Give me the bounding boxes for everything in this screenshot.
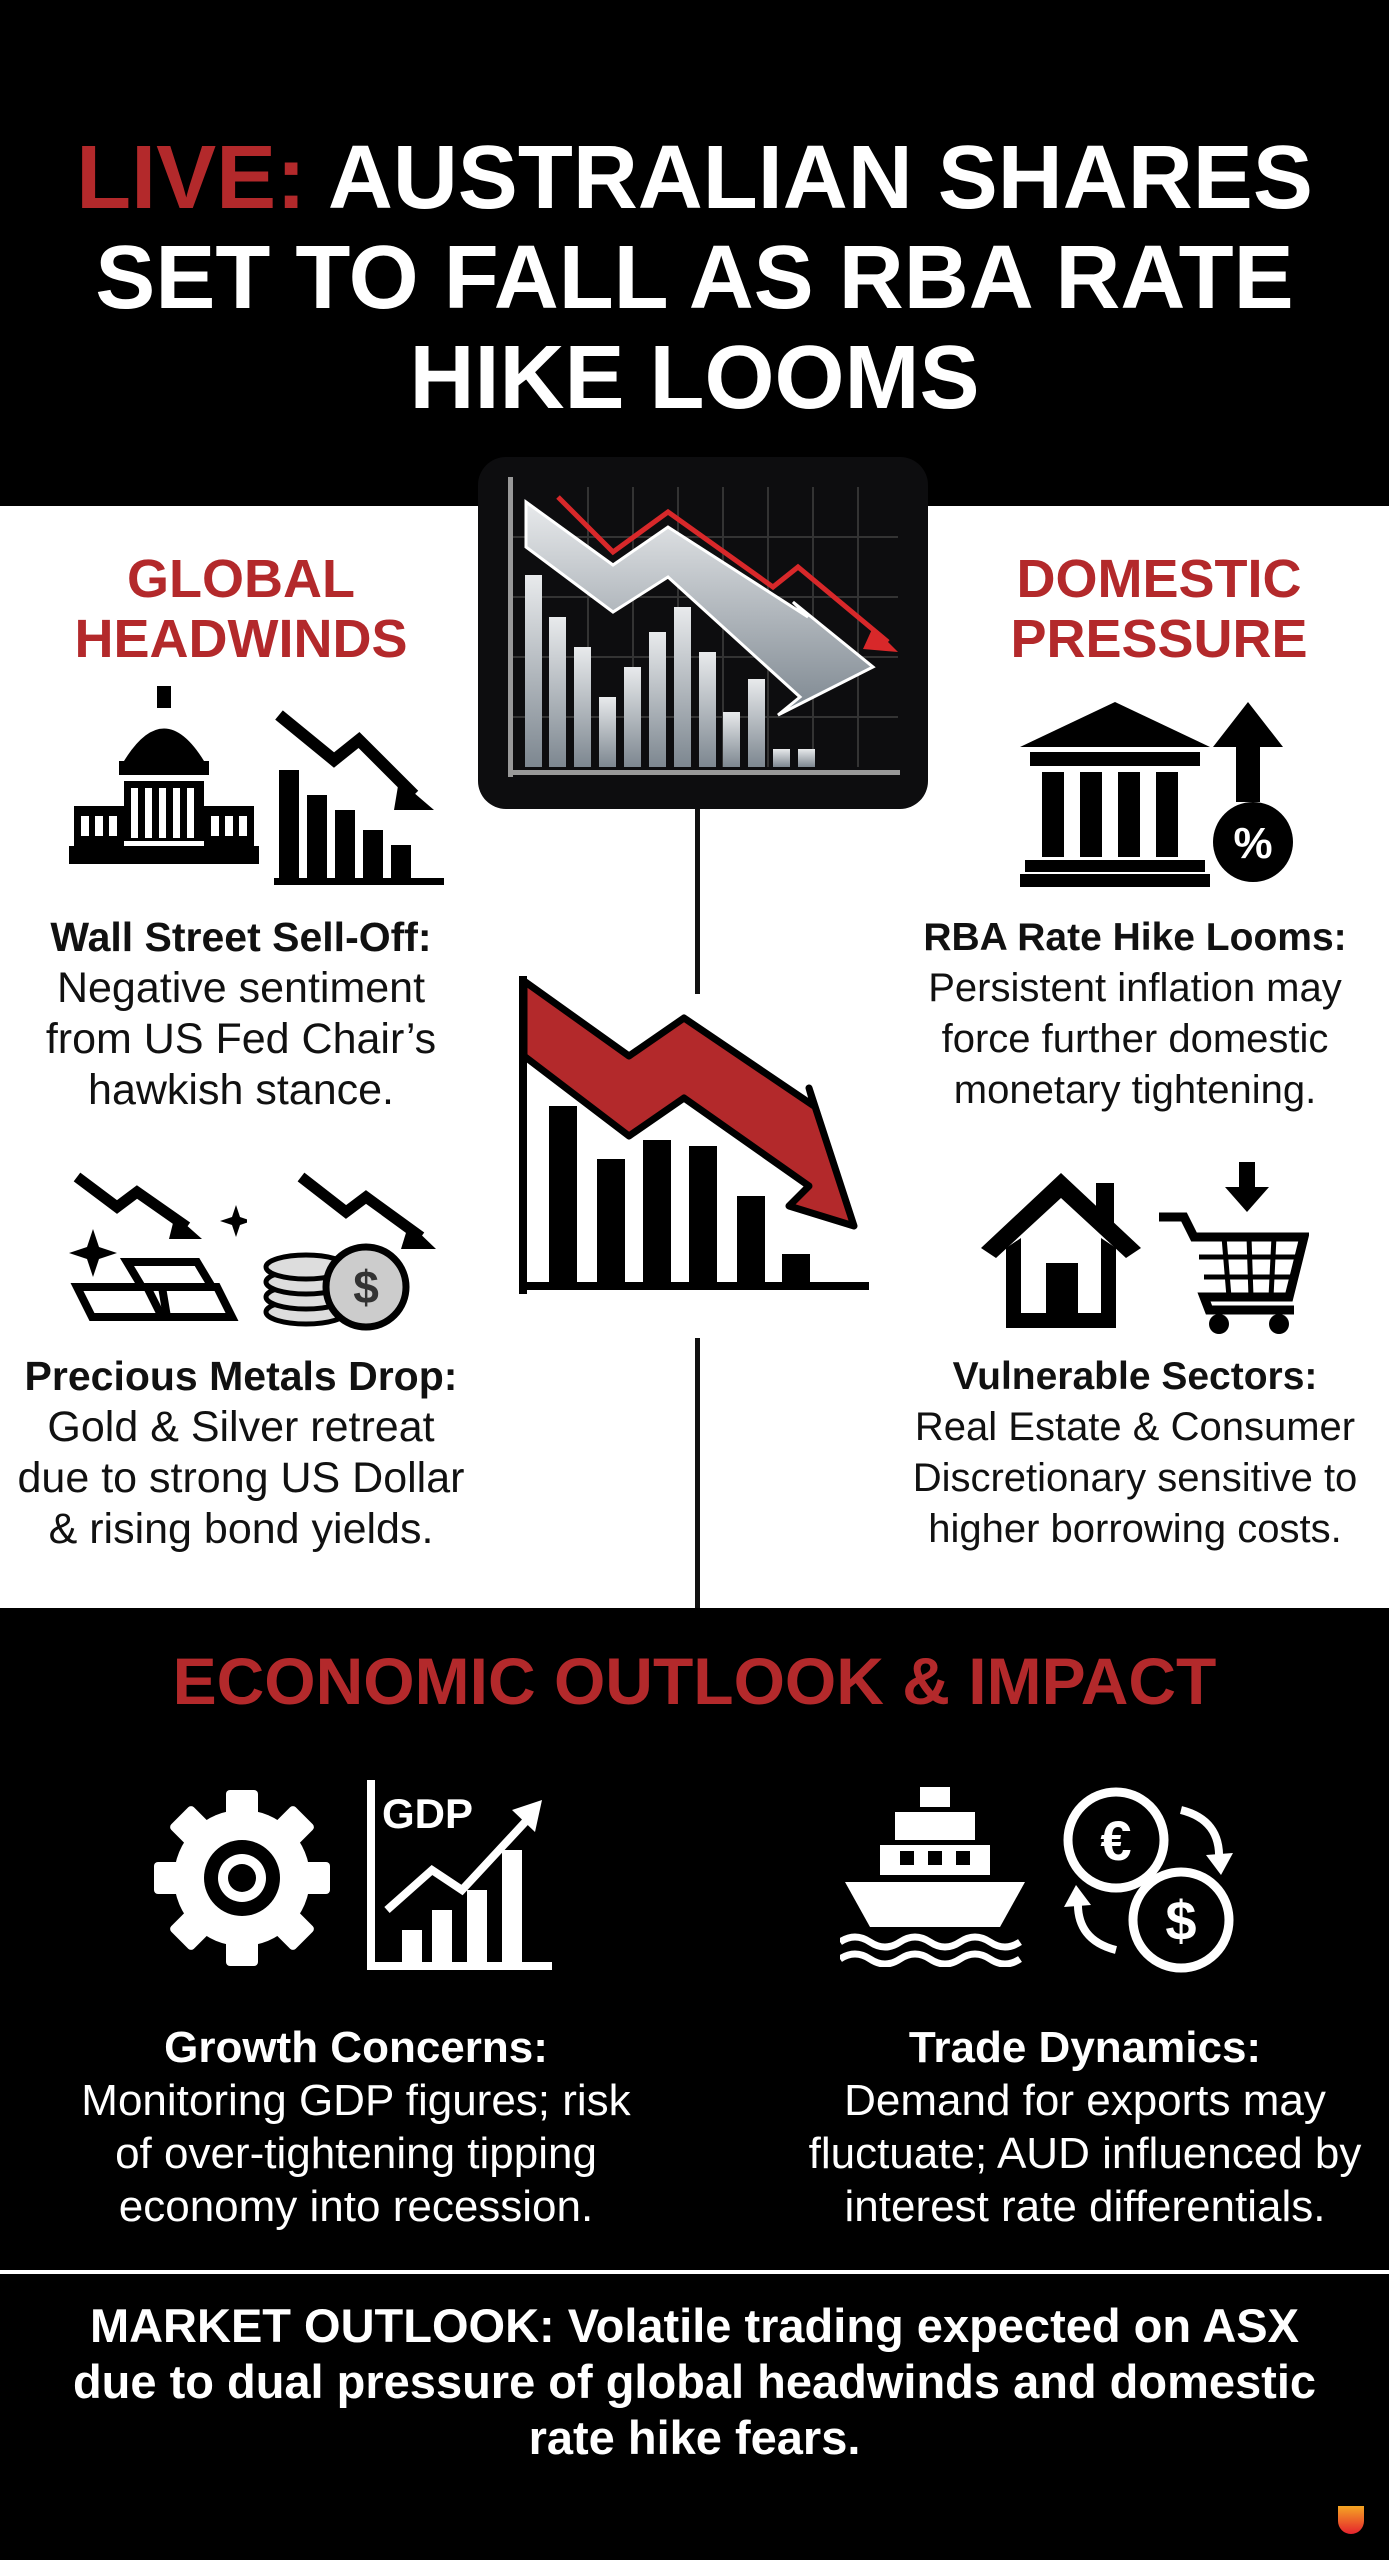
icon: bank bbox=[1020, 702, 1210, 887]
icon: currency exchange bbox=[1064, 1788, 1234, 1972]
text: precious metals: Gold & Silver retreat bbox=[47, 1403, 435, 1451]
text: rba: RBA Rate Hike Looms: bbox=[923, 916, 1347, 959]
text: vulnerable sectors: Discretionary sensitive to bbox=[913, 1456, 1357, 1500]
text: trade dynamics: fluctuate; AUD influenced by bbox=[809, 2129, 1361, 2178]
text: wall street: Wall Street Sell-Off: bbox=[50, 914, 432, 960]
connector line upper bbox=[695, 806, 700, 994]
text: rba: Persistent inflation may bbox=[928, 966, 1342, 1010]
icon: arrow up and percent bbox=[1213, 702, 1293, 882]
heading: economic outlook: ECONOMIC OUTLOOK & IMPACT bbox=[173, 1644, 1216, 1718]
text: wall street bbox=[46, 914, 436, 1114]
text: precious metals: Precious Metals Drop: bbox=[25, 1353, 457, 1399]
icon: logo bbox=[1338, 2506, 1364, 2534]
text: vulnerable sectors: Real Estate & Consumer bbox=[915, 1405, 1355, 1449]
connector line lower bbox=[695, 1338, 700, 1608]
text: trade dynamics: Demand for exports may bbox=[844, 2076, 1326, 2125]
icon: capitol bbox=[69, 686, 259, 864]
text: rba bbox=[923, 916, 1347, 1112]
text: trade dynamics: Trade Dynamics: bbox=[909, 2023, 1261, 2072]
divider bbox=[0, 2270, 1389, 2274]
icon: cart bbox=[1159, 1162, 1309, 1334]
chart: top dark chart box bbox=[478, 457, 928, 809]
text: vulnerable sectors: Vulnerable Sectors: bbox=[953, 1355, 1317, 1398]
text: vulnerable sectors bbox=[913, 1355, 1357, 1551]
heading: global headwinds: GLOBAL bbox=[127, 549, 355, 609]
icon: gdp chart: GDP bbox=[382, 1790, 473, 1837]
text: growth concerns bbox=[81, 2023, 631, 2231]
heading: domestic pressure bbox=[1010, 549, 1308, 669]
footer: market outlook: MARKET OUTLOOK: Volatile trading expected on ASX bbox=[90, 2299, 1299, 2352]
text: precious metals: & rising bond yields. bbox=[49, 1505, 433, 1553]
text: trade dynamics bbox=[809, 2023, 1362, 2231]
footer: market outlook: rate hike fears. bbox=[529, 2411, 860, 2464]
chart: lower red arrow chart bbox=[519, 976, 869, 1294]
footer: market outlook: due to dual pressure of global headwinds and domestic bbox=[73, 2355, 1316, 2408]
text: rba: force further domestic bbox=[942, 1017, 1328, 1061]
icon: gold bars bbox=[69, 1172, 247, 1321]
icon: gdp chart bbox=[367, 1780, 552, 1970]
text: wall street: hawkish stance. bbox=[88, 1066, 394, 1114]
icon: ship bbox=[840, 1787, 1025, 1967]
panel: white middle section bbox=[0, 506, 1389, 1608]
title bbox=[76, 128, 1313, 428]
icon: falling bars bbox=[274, 710, 444, 885]
icon: currency exchange: $ bbox=[1165, 1889, 1197, 1952]
text: growth concerns: Monitoring GDP figures; risk bbox=[81, 2076, 631, 2125]
text: growth concerns: economy into recession. bbox=[119, 2182, 593, 2231]
text: rba: monetary tightening. bbox=[954, 1068, 1316, 1112]
text: wall street: Negative sentiment bbox=[57, 964, 425, 1012]
heading: domestic pressure: DOMESTIC bbox=[1016, 549, 1302, 609]
icon: coins: $ bbox=[353, 1261, 379, 1313]
text: growth concerns: Growth Concerns: bbox=[164, 2023, 548, 2072]
text: growth concerns: of over-tightening tipping bbox=[115, 2129, 597, 2178]
icon: gear bbox=[154, 1790, 330, 1966]
text: precious metals: due to strong US Dollar bbox=[18, 1454, 464, 1502]
title: HIKE LOOMS bbox=[409, 328, 980, 428]
heading: global headwinds: HEADWINDS bbox=[74, 609, 408, 669]
text: vulnerable sectors: higher borrowing costs. bbox=[928, 1507, 1342, 1551]
heading: domestic pressure: PRESSURE bbox=[1010, 609, 1308, 669]
text: wall street: from US Fed Chair’s bbox=[46, 1015, 436, 1063]
title: LIVE: AUSTRALIAN SHARES bbox=[76, 128, 1313, 228]
icon: currency exchange: € bbox=[1100, 1809, 1132, 1872]
icon: coins bbox=[264, 1172, 436, 1330]
text: trade dynamics: interest rate differentials. bbox=[844, 2182, 1326, 2231]
icon: house bbox=[981, 1173, 1141, 1328]
title: SET TO FALL AS RBA RATE bbox=[95, 228, 1294, 328]
text: precious metals bbox=[18, 1353, 464, 1553]
icon: arrow up and percent: % bbox=[1233, 819, 1273, 868]
footer: market outlook bbox=[73, 2299, 1316, 2464]
heading: global headwinds bbox=[74, 549, 408, 669]
